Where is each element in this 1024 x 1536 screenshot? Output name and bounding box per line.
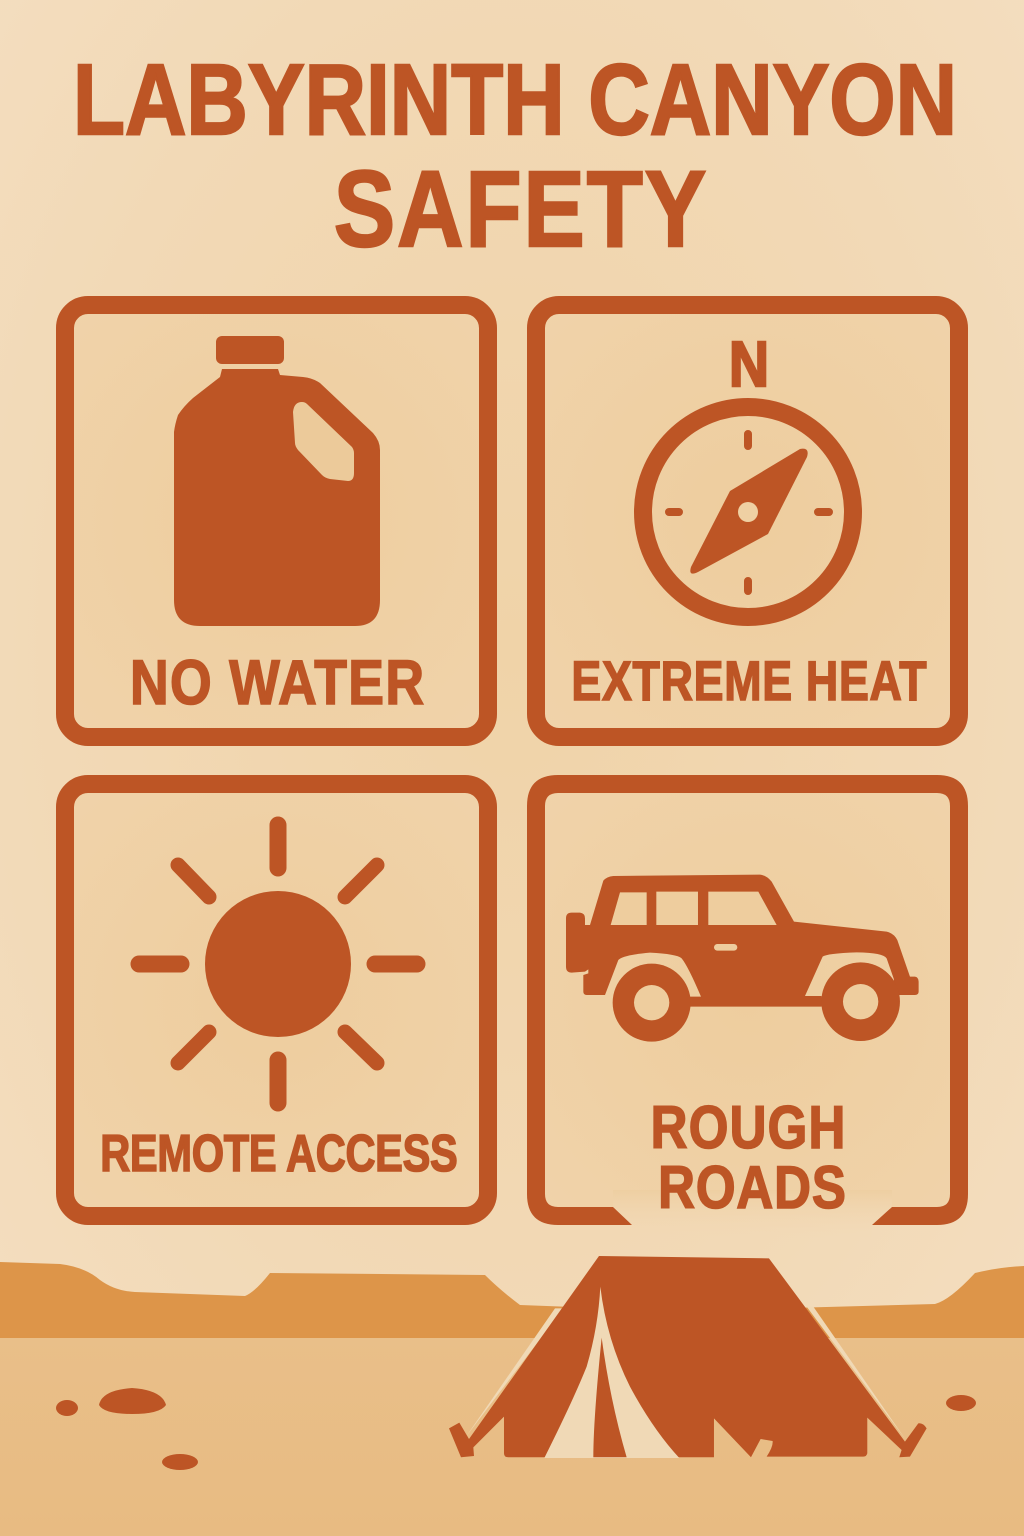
label: remote access: REMOTE ACCESS	[100, 1124, 458, 1182]
landscape: ground	[0, 1338, 1024, 1536]
title: SAFETY	[334, 149, 706, 270]
icon: compass: N	[729, 328, 769, 400]
panel: extreme heat	[536, 305, 959, 737]
panel fill: rough roads	[536, 784, 959, 1215]
label: rough roads: ROADS	[658, 1154, 846, 1221]
panel frame: extreme heat	[536, 305, 959, 737]
landscape: mesa	[0, 1262, 1024, 1338]
icon: compass	[643, 328, 853, 617]
label: rough roads: ROUGH	[651, 1094, 845, 1161]
rocks	[56, 1388, 976, 1470]
panel frame: remote access	[65, 784, 488, 1216]
icon: jeep	[566, 875, 919, 1042]
panel: remote access	[65, 784, 488, 1216]
icon: tent	[449, 1256, 927, 1458]
icon: sun	[139, 825, 417, 1103]
label: extreme heat: EXTREME HEAT	[571, 649, 927, 712]
panel fade at the frame gap	[613, 1190, 892, 1240]
title: LABYRINTH CANYON	[73, 43, 957, 156]
panel frame: rough roads	[527, 775, 968, 1225]
panel: rough roads	[527, 775, 968, 1240]
panel: no water	[65, 305, 488, 737]
label: no water: NO WATER	[130, 648, 424, 718]
title	[73, 43, 957, 270]
panel frame: no water	[65, 305, 488, 737]
icon: water jug	[174, 336, 380, 626]
label: rough roads	[651, 1094, 846, 1221]
